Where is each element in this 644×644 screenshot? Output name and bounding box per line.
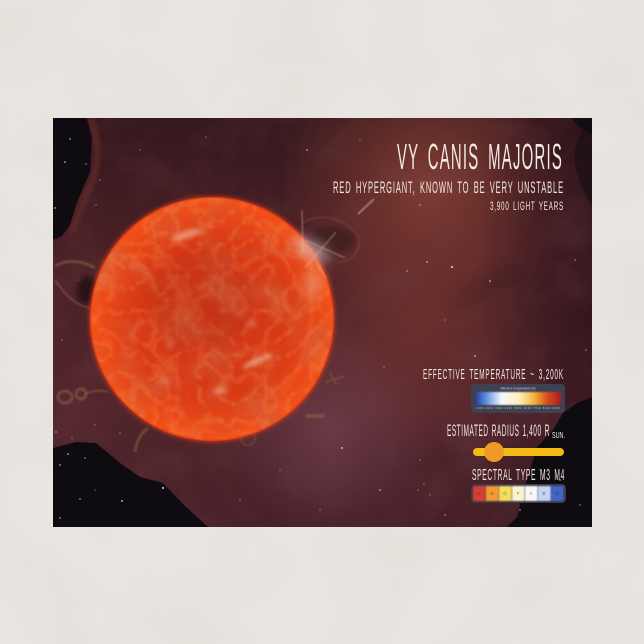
nebula ridge	[72, 118, 97, 232]
distance: 3,900 LIGHT YEARS	[490, 199, 564, 213]
spectral type scale: A	[529, 491, 533, 496]
dust clouds	[55, 217, 359, 452]
spectral type scale: K	[490, 491, 494, 496]
spectral type scale: B	[542, 491, 546, 496]
spectral type scale	[471, 484, 566, 503]
stars	[54, 136, 587, 519]
icon: red hypergiant star	[90, 197, 334, 441]
sun glow	[89, 196, 335, 442]
temperature chart: 1000 2000 3000 4000 5000 6000 7000 8000 9000	[476, 406, 561, 410]
temperature chart: Effective temperature (K)	[500, 386, 536, 390]
radius label: SUN.	[552, 430, 565, 440]
radius slider	[473, 442, 564, 462]
temperature chart	[471, 384, 565, 413]
spectral type scale: M	[477, 491, 481, 496]
spectral type scale: F	[517, 491, 520, 496]
spectral type scale: G	[503, 491, 507, 496]
nebula background	[53, 118, 592, 527]
radius label	[448, 424, 564, 438]
flare	[289, 199, 374, 297]
dark space regions	[53, 118, 592, 527]
panel: space card	[53, 118, 592, 527]
spectral type scale: O	[555, 491, 559, 496]
dark cavity near flare	[308, 226, 356, 254]
